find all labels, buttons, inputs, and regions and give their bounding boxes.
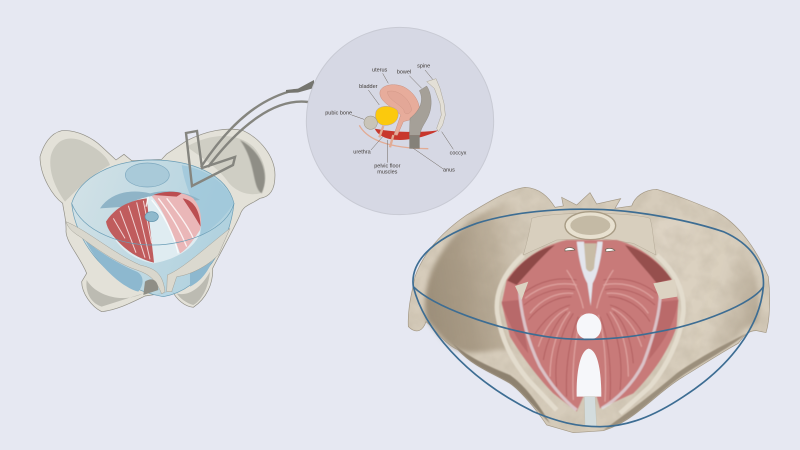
front right pubic ramus	[167, 228, 230, 292]
urethral opening	[577, 313, 601, 339]
label pelvic floor muscles: pelvic floor	[374, 163, 400, 169]
white fibers	[146, 197, 193, 253]
pelvis bone	[408, 187, 770, 433]
ischial spine right	[653, 279, 677, 299]
ring top ellipse	[413, 209, 763, 339]
muscle right top	[152, 192, 201, 253]
outer right slip	[648, 300, 678, 360]
deep blue right of bowl	[182, 165, 233, 237]
bladder	[375, 106, 398, 125]
front left pubic ramus	[66, 222, 165, 294]
label coccyx: coccyx	[450, 150, 467, 156]
circle: sagittal pelvic diagram	[306, 27, 494, 215]
arrow head	[186, 131, 235, 186]
sacrum shadow	[100, 191, 200, 208]
arrow thick root	[286, 80, 314, 93]
dark upper left lobe	[507, 245, 555, 285]
label pelvic floor muscles: muscles	[377, 169, 398, 175]
grey arrow from circle to small pelvis	[186, 80, 314, 186]
dark upper right lobe	[625, 245, 672, 283]
muscle left	[106, 198, 154, 263]
pelvic floor muscles	[375, 129, 438, 140]
muscles	[106, 192, 201, 263]
label pubic bone: pubic bone	[325, 111, 352, 117]
muscle fibers dark	[523, 279, 657, 400]
right wing	[652, 218, 759, 375]
muscle top dark	[153, 192, 201, 227]
lower right shade	[603, 333, 747, 430]
illustration: large pelvis from above	[400, 180, 780, 440]
lower ischium shading	[86, 272, 210, 307]
label anus: anus	[443, 168, 455, 174]
central raphe	[577, 242, 603, 306]
circle panel	[306, 27, 494, 215]
muscle fibers light	[525, 270, 653, 402]
ischial dark spot	[143, 279, 158, 295]
ischial spine left	[515, 282, 528, 300]
obturator opening left	[85, 240, 143, 292]
pubic bone	[362, 114, 380, 132]
right wing shading	[187, 136, 266, 194]
label bowel: bowel	[397, 69, 411, 75]
pelvis back bones	[40, 129, 275, 312]
label urethra: urethra	[353, 149, 372, 155]
pale floor	[107, 194, 201, 263]
bone mottling	[409, 188, 769, 426]
bowl front rim	[72, 203, 234, 245]
muscle sheet	[502, 240, 678, 412]
dark wing shading	[240, 140, 265, 193]
uterus	[380, 85, 419, 135]
sacrum disc	[125, 163, 169, 187]
urethra	[379, 126, 393, 147]
muscle fibers	[113, 201, 152, 259]
illustration: small pelvis with blue bowl	[40, 129, 275, 312]
bowel	[409, 86, 431, 135]
outer left slip	[502, 300, 528, 353]
label bladder: bladder	[359, 84, 378, 90]
urethral opening	[145, 212, 158, 222]
label spine: spine	[417, 64, 430, 70]
vaginal opening	[577, 349, 601, 397]
uterus inner	[387, 91, 412, 114]
white fascia right	[602, 287, 660, 408]
ring lower bowl	[413, 287, 763, 427]
pelvic floor muscles	[502, 240, 678, 412]
lower pale arc	[359, 125, 428, 149]
left wing	[425, 200, 528, 352]
disc center	[570, 216, 610, 235]
lower left shade	[447, 337, 550, 423]
anal canal	[409, 135, 420, 149]
spine	[427, 79, 445, 132]
blue ring	[413, 209, 763, 427]
pubic symphysis	[584, 397, 597, 427]
arrow shaft	[201, 90, 308, 167]
sacral disc	[565, 212, 616, 240]
labels	[325, 64, 467, 175]
label uterus: uterus	[372, 67, 388, 73]
left wing shading	[50, 139, 110, 202]
leader lines	[352, 70, 453, 169]
inner bone rim	[497, 255, 684, 413]
sacral foramina	[565, 248, 615, 252]
blue bowl	[72, 160, 234, 297]
white fascia left	[519, 287, 577, 410]
obturator opening right	[190, 253, 214, 287]
sacrum	[523, 213, 656, 255]
coccyx	[584, 243, 597, 272]
